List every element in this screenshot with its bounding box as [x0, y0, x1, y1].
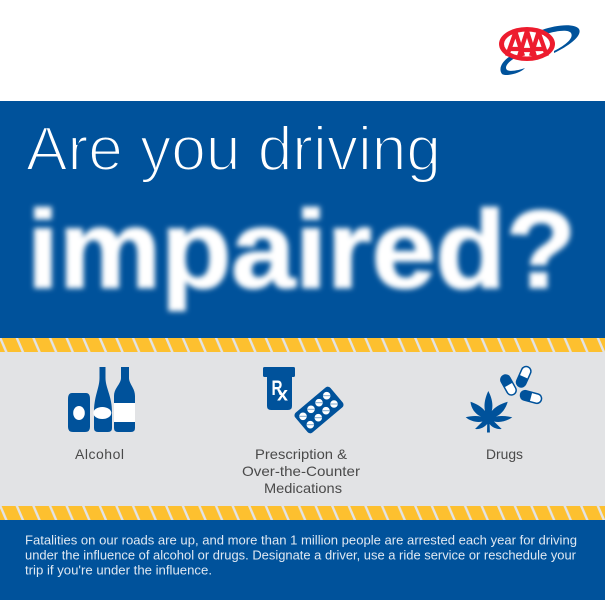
label: Drugs: Drugs: [486, 446, 523, 462]
panel: hero: [0, 101, 605, 338]
label: Prescription and OTC medications: Prescription &: [255, 446, 348, 462]
label: Prescription and OTC medications: Medications: [264, 480, 342, 496]
footer text: [25, 532, 577, 578]
footer text: trip if you're under the influence.: [25, 562, 212, 578]
footer text: under the influence of alcohol or drugs. Designate a driver, use a ride service or reschedule your: [25, 548, 577, 562]
label: Prescription and OTC medications: [242, 446, 360, 496]
icon: prescription bottle and blister pack: x: [277, 384, 288, 406]
label: Prescription and OTC medications: Over-the-Counter: [242, 463, 360, 479]
icon: alcohol: [68, 367, 135, 432]
heading: impaired? blurred: impaired?: [27, 188, 576, 312]
panel: footer: [0, 520, 605, 600]
icon: prescription bottle and blister pack: R: [272, 377, 282, 400]
caution stripe bottom: [0, 506, 605, 520]
panel: categories: [0, 352, 605, 506]
caution stripe top: [0, 338, 605, 352]
logo: AAA: [499, 25, 580, 75]
footer text: Fatalities on our roads are up, and more than 1 million people are arrested each year for driving: [25, 532, 577, 548]
icon: drugs: [466, 364, 544, 432]
label: Alcohol: Alcohol: [75, 446, 124, 462]
icon: prescription bottle and blister pack: [263, 367, 345, 435]
heading: Are you driving: Are you driving: [26, 115, 441, 184]
